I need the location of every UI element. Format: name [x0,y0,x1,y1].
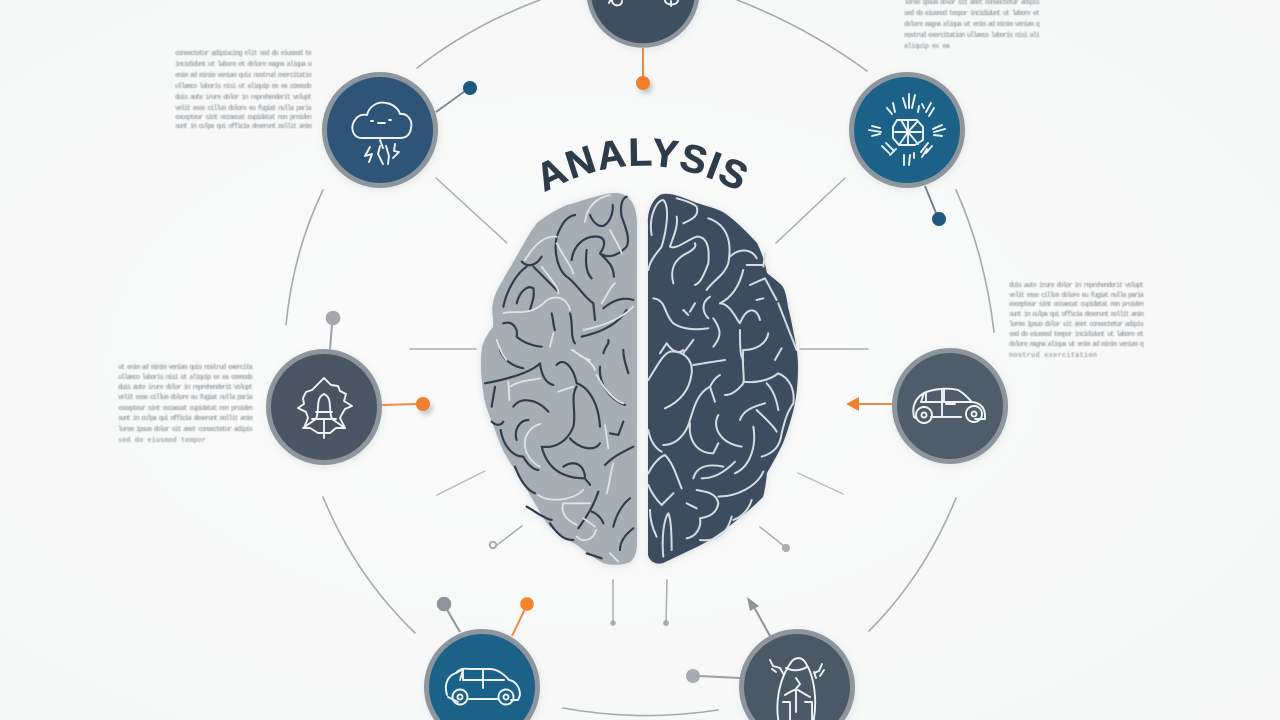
right brain hemisphere [648,194,798,564]
node: car right [846,350,1006,462]
text block: right: duis aute irure dolor in reprehenderit volupt [1009,282,1144,290]
text block: right: sed do eiusmod tempor incididunt ut labore et [1009,331,1144,339]
text block: right: dolore magna aliqua ut enim ad minim veniam q [1009,341,1144,349]
text block: upper left [175,50,313,131]
radial connector lines around brain [410,178,868,625]
text block: upper left: ullamco laboris nisi ut aliquip ex ea commodo [175,83,312,91]
text block: left: velit esse cillum dolore eu fugiat nulla paria [118,394,254,402]
icon: hooded figure [770,658,824,720]
text block: upper left: excepteur sint occaecat cupidatat non proiden [175,114,312,122]
text block: right: excepteur sint occaecat cupidatat non proiden [1009,301,1144,309]
text block: upper left: sunt in culpa qui officia deserunt mollit anim [175,123,312,131]
text block: upper right: nostrud exercitation ullamco laboris nisi ali [904,32,1040,40]
text block: right: sunt in culpa qui officia deserunt mollit anim [1009,311,1144,319]
text block: right: velit esse cillum dolore eu fugiat nulla paria [1009,292,1145,300]
text block: left: excepteur sint occaecat cupidatat non proiden [118,405,253,413]
text block: upper right: dolore magna aliqua ut enim ad minim veniam q [904,21,1040,29]
left hemisphere dark folds [503,197,633,353]
text block: upper left: enim ad minim veniam quis nostrud exercitatio [175,72,312,80]
text block: left: sed do eiusmod tempor [118,437,206,445]
text block: left: ullamco laboris nisi ut aliquip ex ea commodo [118,374,253,382]
brain illustration [481,193,798,565]
text block: upper right: aliquip ex ea [904,43,951,51]
text block: left [118,364,254,445]
node: radiant brain [852,74,962,226]
text block: upper left: consectetur adipiscing elit sed do eiusmod te [175,50,312,58]
right hemisphere light folds [648,198,797,360]
node: cloud [324,74,477,186]
title: ANALYSIS: ANALYSIS [542,138,747,192]
icon: car side [913,389,985,423]
text block: upper left: velit esse cillum dolore eu fugiat nulla paria [175,105,313,113]
text block: left: ut enim ad minim veniam quis nostrud exercita [118,364,254,372]
text block: upper left: incididunt ut labore et dolore magna aliqua u [175,61,312,69]
node: figure bottom right [686,597,852,720]
text block: right: nostrud exercitation [1009,352,1097,360]
node: car bottom left [426,597,538,720]
outer ring arcs [286,0,994,716]
icon: car front [446,669,520,704]
text block: left: lorem ipsum dolor sit amet consectetur adipis [118,426,253,434]
text block: left: duis aute irure dolor in reprehenderit volupt [118,384,253,392]
icon: cloud [352,103,411,164]
node: bell [268,311,430,462]
text block: upper left: duis aute irure dolor in reprehenderit volupt [175,94,312,102]
left hemisphere light folds [497,195,633,360]
left brain hemisphere [481,193,637,565]
icon: bell in leaf [298,378,352,438]
text block: left: sunt in culpa qui officia deserunt mollit anim [118,415,253,423]
text block: right: lorem ipsum dolor sit amet consectetur adipis [1009,321,1144,329]
text block: right [1009,282,1145,360]
text block: upper right: sed do eiusmod tempor incididunt ut labore et [904,10,1040,18]
text block: upper right [904,0,1040,51]
node: top [588,0,698,90]
icon: radiant core [869,94,945,165]
